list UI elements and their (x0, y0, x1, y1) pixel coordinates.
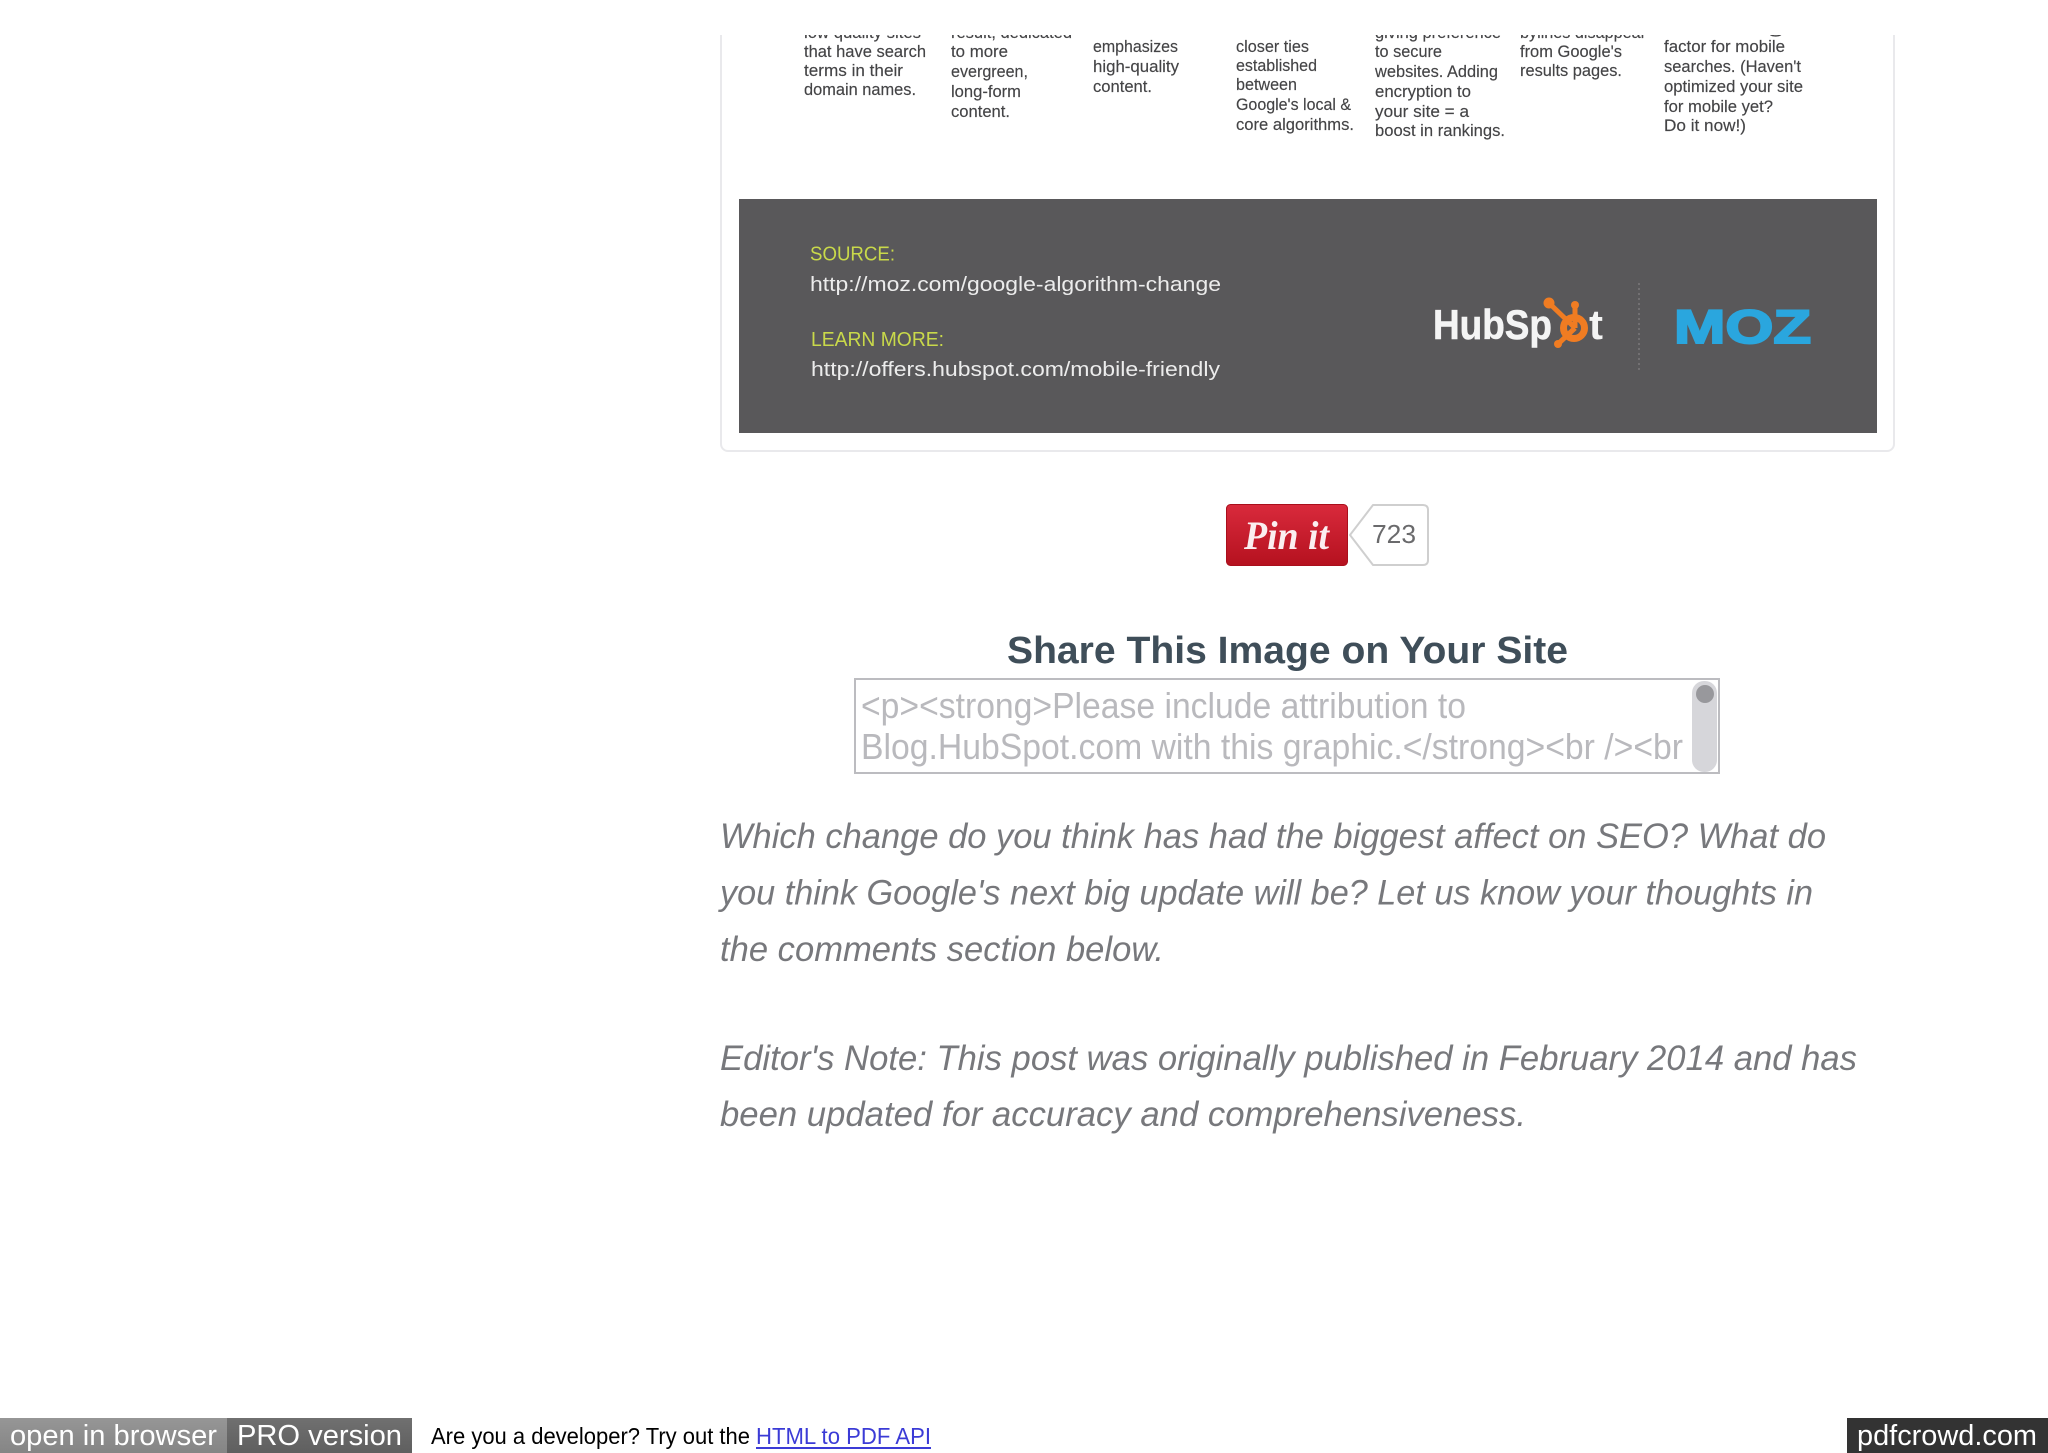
source label and link: http://moz.com/google-algorithm-change (810, 274, 1221, 296)
column 2 text: long-form (951, 83, 1021, 101)
column 5 text: your site = a (1375, 103, 1470, 121)
embed code textarea (855, 679, 1719, 773)
column 1 text: low quality sites (804, 24, 921, 42)
column 2 text: evergreen, (951, 63, 1028, 81)
column 3 text (1093, 38, 1180, 96)
column 1 text (804, 35, 926, 96)
scrollbar (1692, 681, 1717, 772)
column 4 text: closer ties (1236, 38, 1309, 56)
paragraph: closing question (718, 817, 1826, 969)
column 7 text: Do it now!) (1664, 117, 1746, 135)
learn more label and link: http://offers.hubspot.com/mobile-friendly (811, 359, 1220, 381)
pin count bubble: 723 (1372, 519, 1416, 549)
button: Pin it (1226, 504, 1348, 566)
column 3 text: high-quality (1093, 58, 1180, 76)
column 6 text: from Google's (1520, 43, 1622, 61)
embed code textarea: <p><strong>Please include attribution to (861, 685, 1466, 726)
embed code textarea: Blog.HubSpot.com with this graphic.</strong><br /><br (861, 726, 1683, 767)
logo: HubSpot: t (1589, 301, 1603, 348)
column 2 text (951, 35, 1072, 118)
column 2 text: result, dedicated (951, 24, 1072, 42)
pin count bubble (1350, 505, 1428, 565)
footer band: sources and logos (739, 199, 1877, 433)
button: Pin it: Pin it (1243, 513, 1331, 558)
column 4 text (1236, 38, 1354, 134)
paragraph: editor's note: Editor's Note: This post was originally published in February 2014 and has (720, 1039, 1857, 1078)
footer: developer prompt: Are you a developer? Try out the (431, 1423, 750, 1449)
footer: PRO version button: PRO version (237, 1420, 402, 1452)
column 2 text: to more (951, 43, 1008, 61)
column 7 text: factor for mobile (1664, 38, 1785, 56)
column 5 text: to secure (1375, 43, 1442, 61)
paragraph: editor's note: been updated for accuracy and comprehensiveness. (720, 1095, 1526, 1134)
paragraph: closing question: you think Google's next big update will be? Let us know your thoughts in (718, 874, 1813, 912)
column 1 text: domain names. (804, 81, 916, 99)
panel: infographic card (721, 10, 1894, 451)
source label and link: SOURCE: (810, 244, 895, 266)
column 5 text: giving preference (1375, 24, 1501, 42)
column 1 text: that have search (804, 43, 926, 61)
column 7 text (1664, 35, 1802, 135)
source label and link (810, 244, 1221, 296)
column 7 text: for mobile yet? (1664, 98, 1773, 116)
learn more label and link: LEARN MORE: (811, 329, 944, 351)
footer: open in browser button: open in browser (10, 1420, 217, 1452)
paragraph: closing question: the comments section below. (720, 930, 1164, 969)
footer: pdfcrowd badge: pdfcrowd.com (1857, 1420, 2037, 1452)
paragraph: editor's note (720, 1039, 1857, 1134)
learn more label and link (811, 329, 1220, 381)
logo: Moz: MOZ (1674, 300, 1811, 353)
column 7 text: searches. (Haven't (1664, 58, 1801, 76)
footer: API link: HTML to PDF API (756, 1423, 931, 1449)
column 5 text: boost in rankings. (1375, 122, 1505, 140)
column 3 text: emphasizes (1093, 38, 1178, 56)
column 4 text: between (1236, 76, 1297, 94)
column 5 text: websites. Adding (1374, 63, 1498, 81)
heading: share this image: Share This Image on Your Site (1007, 630, 1568, 672)
column 1 text: terms in their (804, 62, 904, 80)
logo: HubSpot: HubSp (1433, 301, 1552, 348)
column 7 text: a ranking (1664, 19, 1784, 37)
column 4 text: core algorithms. (1236, 116, 1354, 134)
column 6 text: results pages. (1520, 62, 1622, 80)
column 6 text (1520, 35, 1644, 80)
paragraph: closing question: Which change do you think has had the biggest affect on SEO? What do (720, 817, 1826, 856)
column 4 text: Google's local & (1236, 96, 1351, 114)
column 7 text: optimized your site (1664, 78, 1803, 96)
column 4 text: established (1236, 57, 1317, 75)
column 2 text: content. (951, 103, 1010, 121)
column 6 text: bylines disappear (1520, 24, 1646, 42)
column 5 text (1374, 35, 1504, 140)
column 3 text: content. (1093, 78, 1152, 96)
column 5 text: encryption to (1375, 83, 1471, 101)
text columns: algorithm update descriptions (804, 35, 1802, 140)
